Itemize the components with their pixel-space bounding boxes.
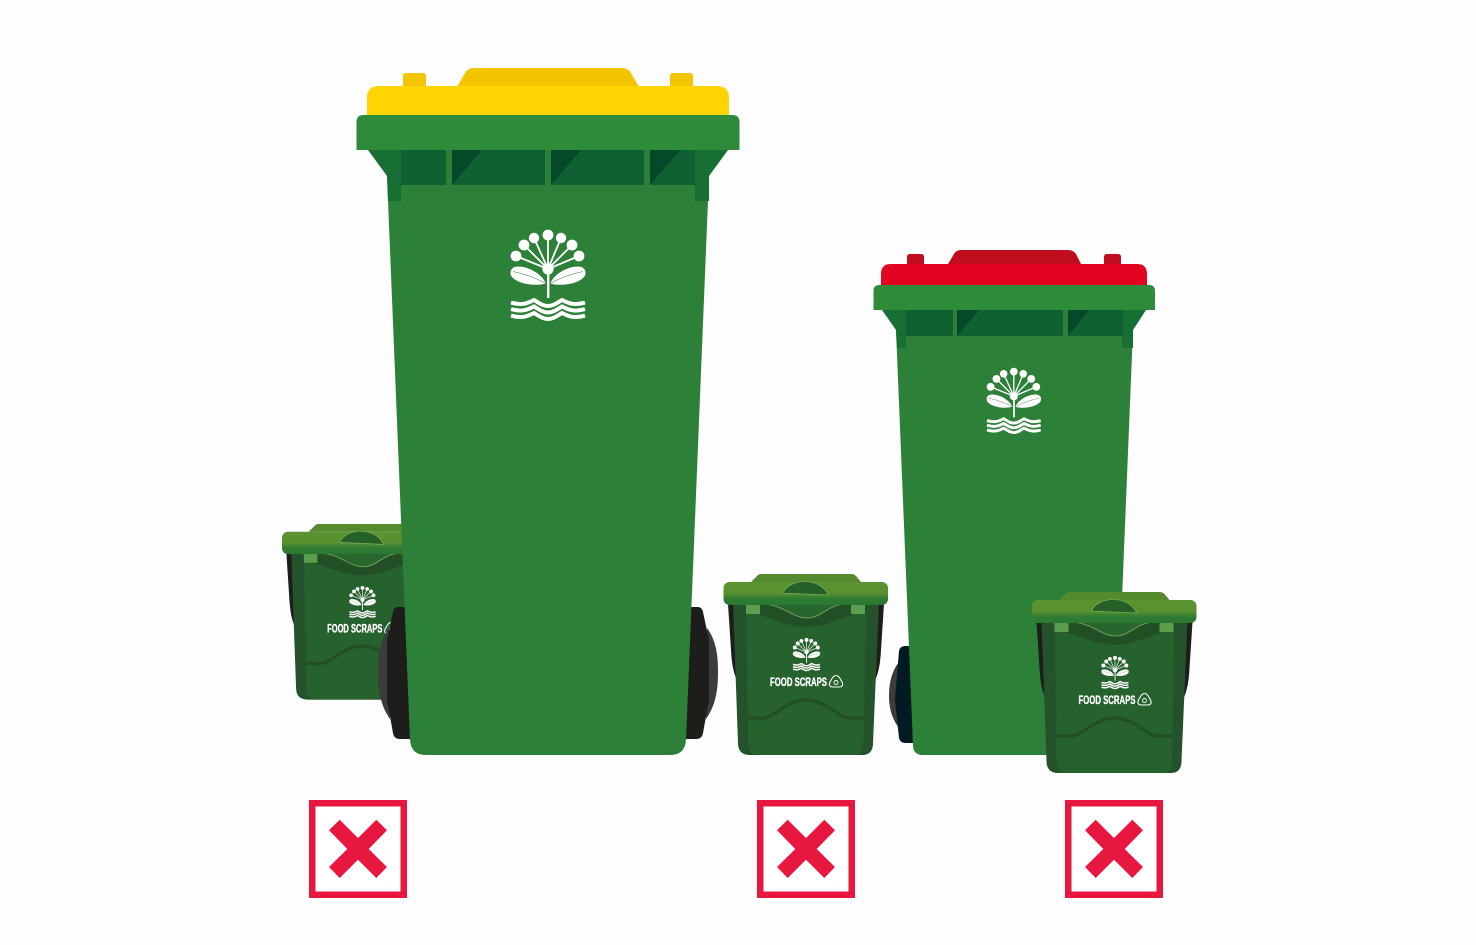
vents and brackets: [368, 150, 728, 201]
vents and brackets: [882, 310, 1146, 348]
body: [387, 176, 709, 755]
logo: [987, 368, 1041, 433]
cross mark: right: [1068, 803, 1160, 895]
food scraps caddy: left, behind yellow bin: [282, 524, 442, 700]
cross mark: centre: [760, 803, 852, 895]
logo: [510, 230, 586, 319]
rim: [356, 115, 740, 150]
wheel: [889, 646, 913, 743]
wheels: [378, 607, 718, 739]
body: [896, 330, 1133, 755]
food scraps caddy: right, in front of red bin: [1032, 592, 1196, 773]
lid: [881, 250, 1147, 286]
yellow-lid wheelie bin: [356, 68, 740, 755]
rim: [874, 285, 1155, 310]
food scraps caddy: right, in front of red bin: FOOD SCRAPS: [1078, 693, 1136, 707]
food scraps caddy: centre: [724, 574, 888, 755]
red-lid wheelie bin: [874, 250, 1155, 755]
food scraps caddy: left, behind yellow bin: FOOD SCRAPS: [327, 623, 383, 636]
cross mark: left: [312, 803, 404, 895]
food scraps caddy: centre: FOOD SCRAPS: [770, 675, 827, 689]
lid: [367, 68, 729, 116]
